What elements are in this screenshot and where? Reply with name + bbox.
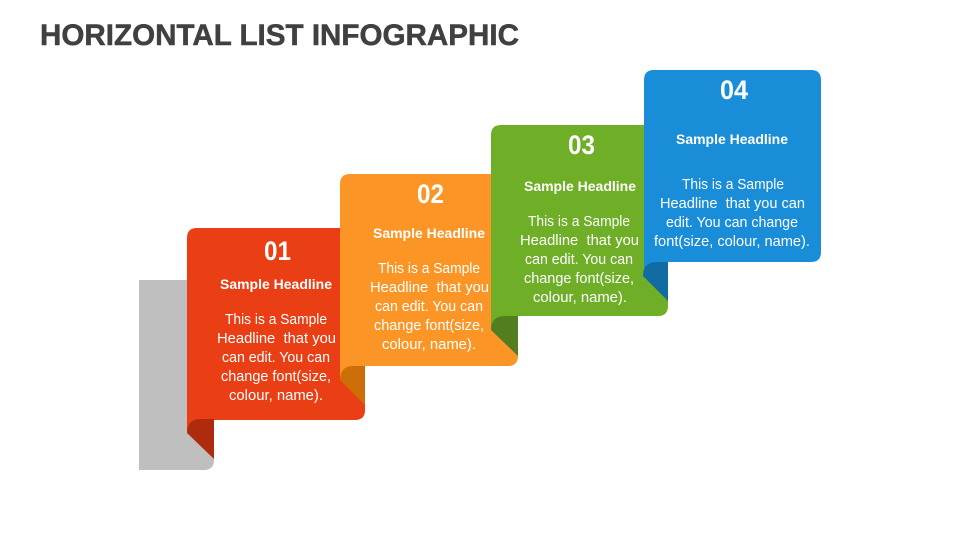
panel: step 01: 01 bbox=[264, 236, 291, 266]
panel: step 03: colour, name). bbox=[533, 290, 627, 306]
panel: step 01: change font(size, bbox=[221, 369, 331, 385]
panel: step 02: change font(size, bbox=[374, 318, 484, 334]
panel: step 02: This is a Sample bbox=[378, 261, 480, 277]
panel: step 03 bbox=[491, 125, 668, 356]
panel: step 01: colour, name). bbox=[229, 388, 323, 404]
panel: step 03: Sample Headline bbox=[524, 178, 636, 194]
panel: step 02: 02 bbox=[417, 179, 444, 209]
panel: step 01: Headline that you bbox=[217, 331, 336, 347]
grey backing strip bbox=[139, 280, 214, 470]
panel: step 03: change font(size, bbox=[524, 271, 634, 287]
panel: step 04 bbox=[643, 70, 821, 301]
panel: step 04: Headline that you can bbox=[660, 196, 805, 212]
panel: step 02: colour, name). bbox=[382, 337, 476, 353]
panel: step 01 bbox=[187, 228, 365, 459]
panel: step 03: 03 bbox=[568, 130, 595, 160]
panel: step 04: This is a Sample bbox=[682, 177, 784, 193]
panel: step 03: can edit. You can bbox=[525, 252, 633, 268]
panel: step 01: Sample Headline bbox=[220, 276, 332, 292]
title: HORIZONTAL LIST INFOGRAPHIC bbox=[40, 19, 519, 52]
panel: step 02: can edit. You can bbox=[375, 299, 483, 315]
panel: step 04: Sample Headline bbox=[676, 131, 788, 147]
panel: step 04: font(size, colour, name). bbox=[654, 234, 810, 250]
panel: step 03: Headline that you bbox=[520, 233, 639, 249]
panel: step 02: Sample Headline bbox=[373, 225, 485, 241]
panel: step 04: 04 bbox=[720, 75, 748, 105]
panel: step 02: Headline that you bbox=[370, 280, 489, 296]
panel: step 04: edit. You can change bbox=[666, 215, 798, 231]
panel: step 03: This is a Sample bbox=[528, 214, 630, 230]
panel: step 01: This is a Sample bbox=[225, 312, 327, 328]
panel: step 01: can edit. You can bbox=[222, 350, 330, 366]
panel: step 02 bbox=[340, 174, 518, 405]
